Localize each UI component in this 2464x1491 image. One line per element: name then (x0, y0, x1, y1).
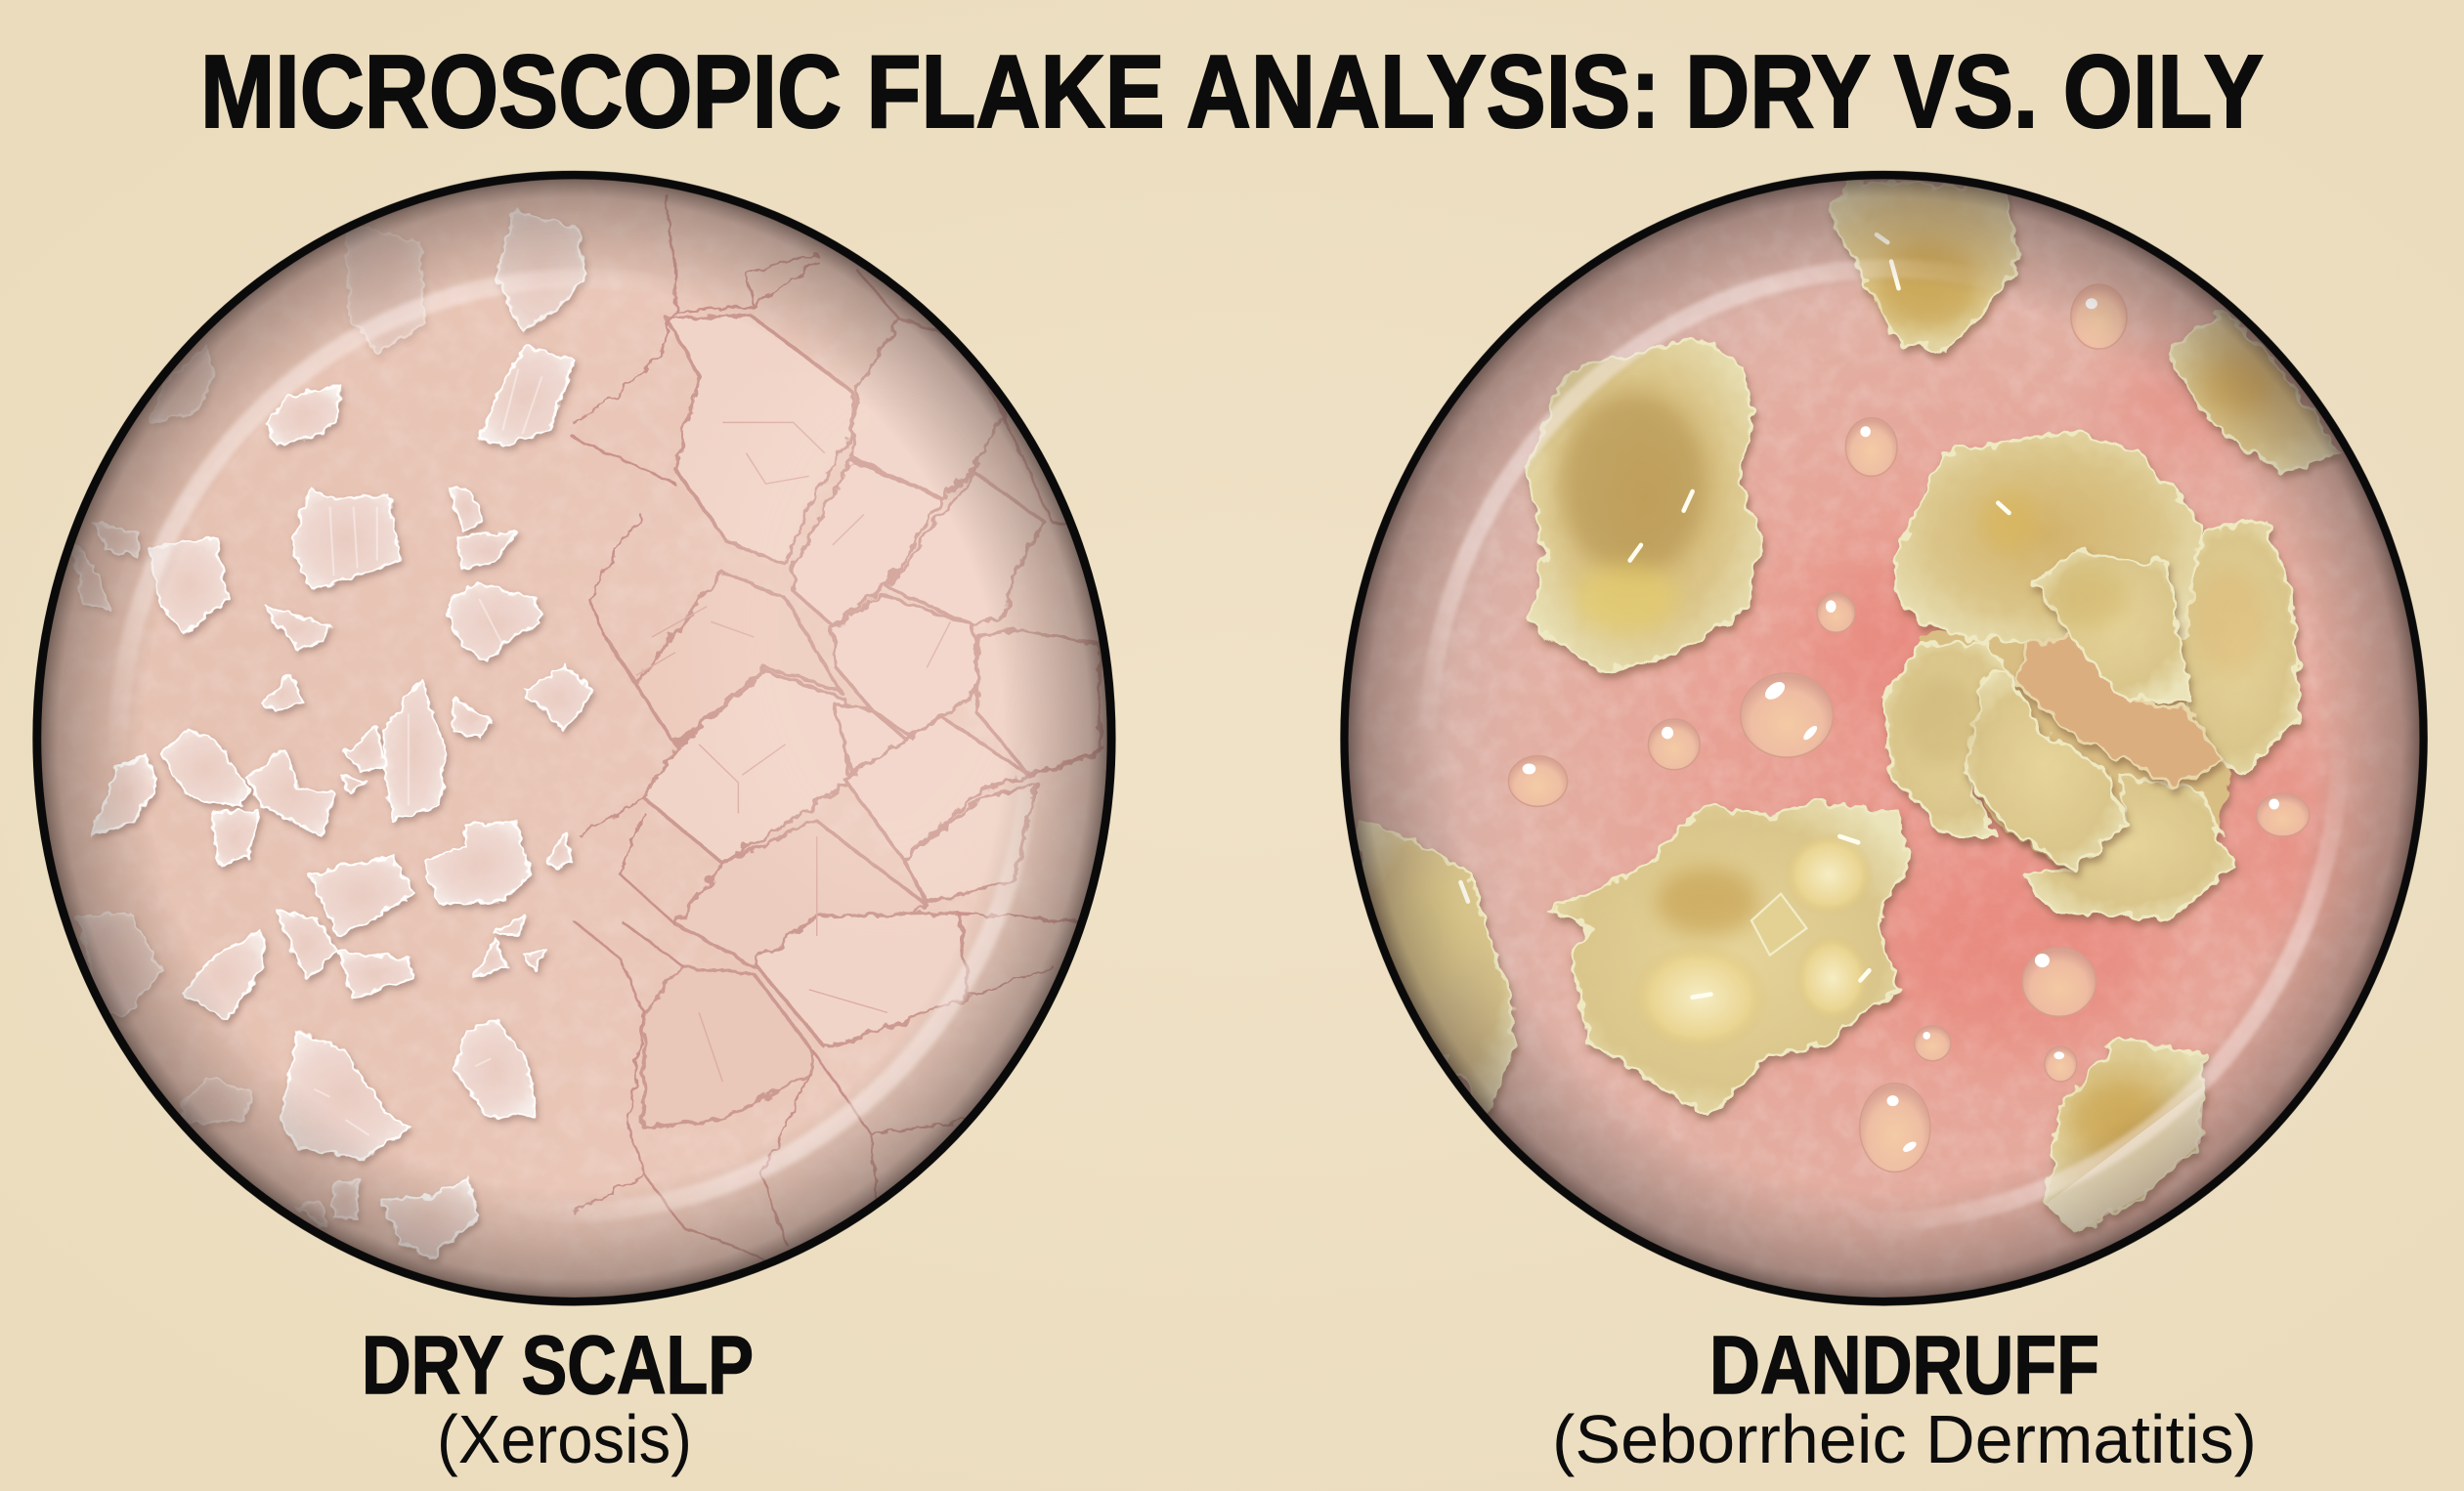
soft brightness on cracked side (713, 363, 1048, 889)
lens glare arcs (1427, 269, 2341, 1221)
panel: dandruff magnified circle (1310, 147, 2464, 1348)
overlapping flake layers (1965, 549, 2223, 871)
oily droplets (1508, 284, 2310, 1172)
lens glare arcs (117, 278, 1030, 1213)
cracked skin plates (605, 316, 1100, 1128)
white skin flakes (74, 212, 593, 1257)
sublabel: seborrheic dermatitis: (Seborrheic Dermatitis) (1552, 1401, 2257, 1477)
crack lines (574, 192, 1103, 1257)
fine cracks (636, 422, 950, 1082)
red inflammation (1803, 346, 2333, 1051)
flake shading and gloss (1387, 234, 2270, 1231)
oily yellow flakes (1358, 181, 2340, 1231)
sublabel: xerosis: (Xerosis) (437, 1401, 692, 1477)
panel: dry scalp magnified circle (32, 170, 1116, 1306)
label: dandruff: DANDRUFF (1709, 1319, 2099, 1411)
flake surface details (314, 368, 541, 1135)
lens black rim (1344, 175, 2424, 1301)
lens black rim (37, 175, 1111, 1301)
lens vignette (37, 175, 1111, 1301)
label: dry scalp: DRY SCALP (362, 1319, 754, 1411)
lens vignette (1344, 175, 2424, 1301)
